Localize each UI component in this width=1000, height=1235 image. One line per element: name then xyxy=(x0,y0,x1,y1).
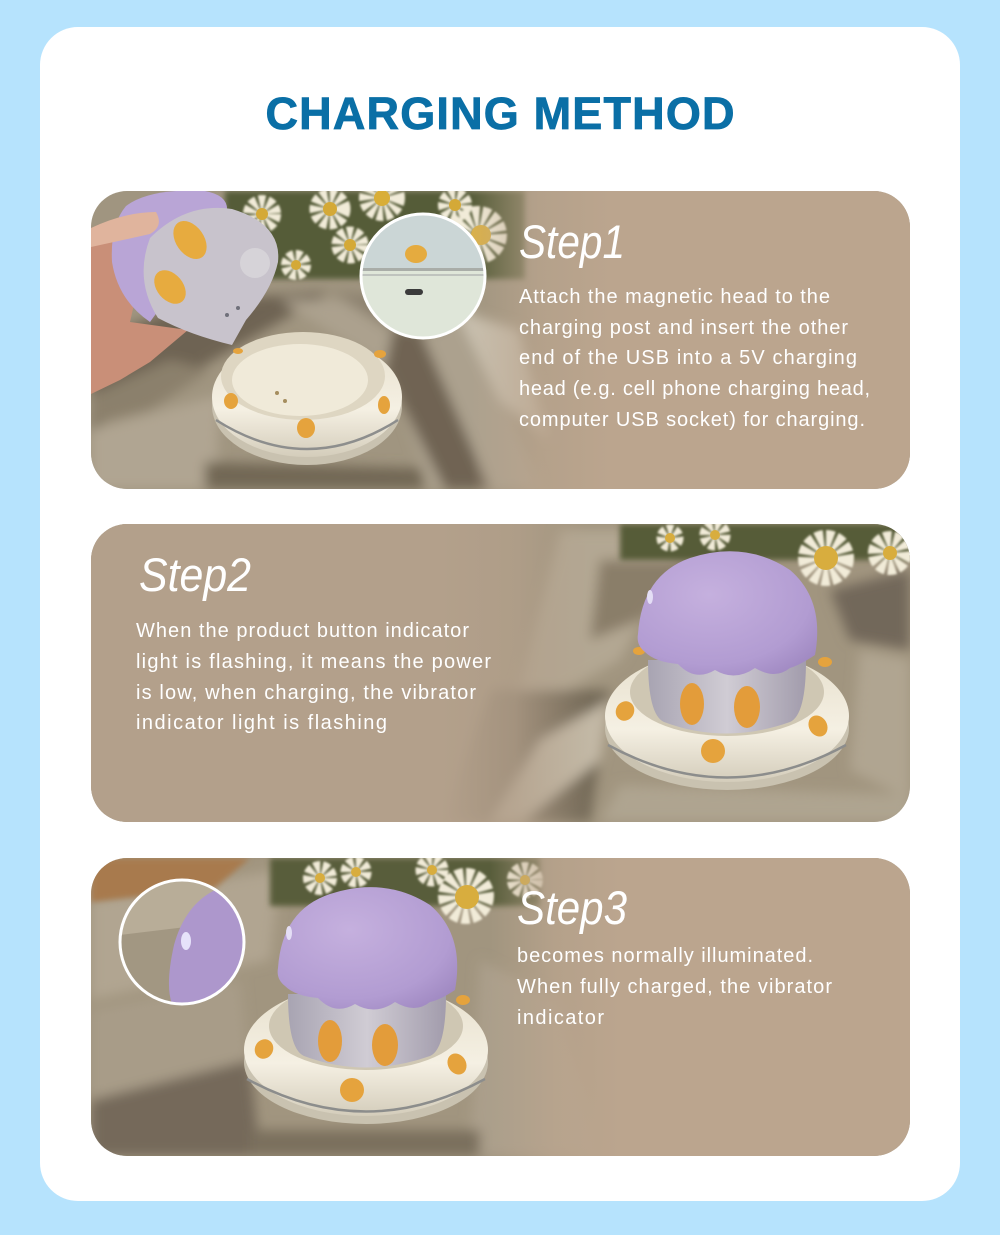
icon: hand holding product xyxy=(91,191,278,394)
satin folds xyxy=(496,529,910,822)
tan fade right xyxy=(470,191,610,489)
text block: step 3: When fully charged, the vibrator xyxy=(517,976,832,998)
text block: step 1: head (e.g. cell phone charging head, xyxy=(519,378,870,400)
text block: step 2: is low, when charging, the vibrator xyxy=(136,682,476,704)
circle outline xyxy=(120,880,244,1004)
satin folds xyxy=(91,872,523,1156)
heading: Step3: Step3 xyxy=(517,881,627,934)
flowers backdrop xyxy=(620,524,910,575)
text block: step 2: When the product button indicator xyxy=(136,620,469,642)
flowers backdrop xyxy=(225,184,525,279)
icon: charging base xyxy=(212,332,402,465)
text block: step 2: indicator light is flashing xyxy=(136,712,387,734)
text block: step 2: light is flashing, it means the power xyxy=(136,651,491,673)
tan fade left xyxy=(91,524,441,822)
icon: magnified USB port xyxy=(360,213,486,339)
panel: step 1 xyxy=(91,184,910,489)
wood and flowers backdrop xyxy=(91,858,540,913)
icon: product on charging base xyxy=(605,551,849,790)
satin folds xyxy=(91,292,550,489)
circle outline xyxy=(361,214,485,338)
text block: step 3: indicator xyxy=(517,1007,604,1029)
panel: step 2 xyxy=(91,524,910,822)
text block: step 1 xyxy=(519,286,870,431)
text block: step 1: end of the USB into a 5V charging xyxy=(519,347,857,369)
text block: step 1: charging post and insert the other xyxy=(519,317,848,339)
tan fade right xyxy=(490,858,620,1156)
text block: step 2 xyxy=(136,620,491,734)
text block: step 3 xyxy=(517,945,832,1029)
title: CHARGING METHOD xyxy=(266,88,734,139)
panel: step 3 xyxy=(91,858,910,1156)
icon: magnified indicator light xyxy=(120,880,244,1004)
heading: Step1: Step1 xyxy=(519,215,625,268)
icon: product on charging base xyxy=(244,887,488,1124)
heading: Step2: Step2 xyxy=(139,548,251,601)
text block: step 3: becomes normally illuminated. xyxy=(517,945,813,967)
text block: step 1: computer USB socket) for charging. xyxy=(519,409,865,431)
text block: step 1: Attach the magnetic head to the xyxy=(519,286,830,308)
